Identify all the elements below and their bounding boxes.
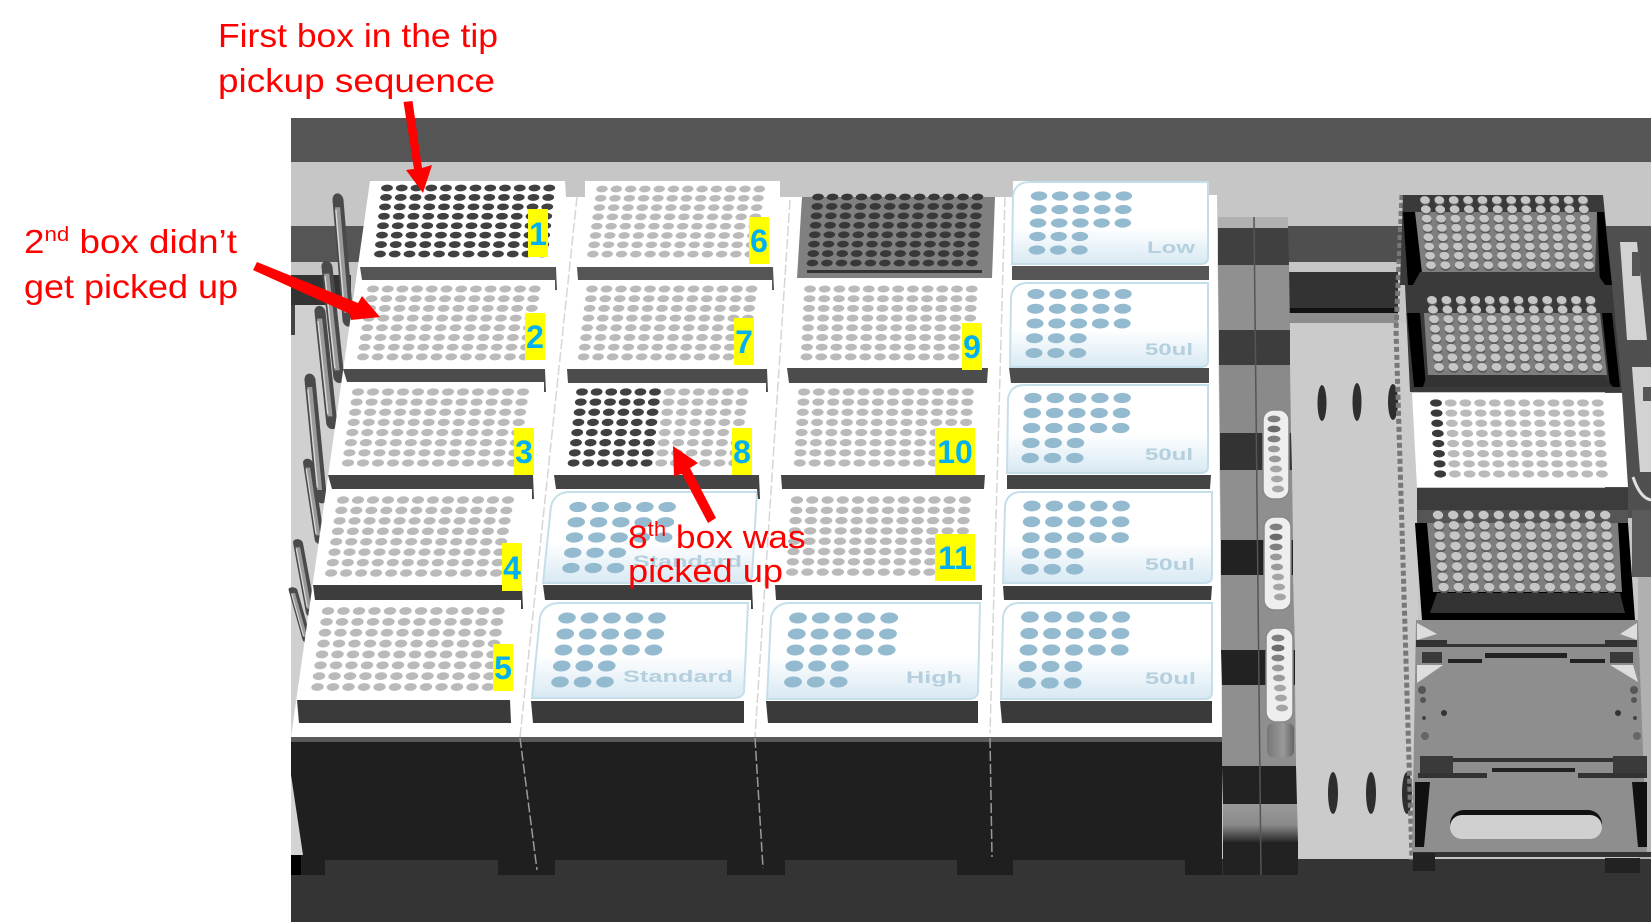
callout: eighth box xyxy=(628,519,806,589)
tip box Standard row 4 xyxy=(543,492,757,583)
stack rail speckle xyxy=(1396,195,1412,860)
tip box High xyxy=(767,603,980,699)
label: number 8 xyxy=(732,428,752,475)
tube 1 xyxy=(1263,410,1289,499)
tip box 50ul row 4: 50ul xyxy=(1145,555,1195,574)
box 2: full xyxy=(357,286,541,360)
label: number 5 xyxy=(493,644,513,691)
box 7: full xyxy=(577,286,758,360)
panel: dark front bars of the boxes xyxy=(297,266,1212,723)
callout: eighth box: th xyxy=(648,519,666,541)
stack 1 xyxy=(1400,195,1612,285)
callout: second box: box didn’t xyxy=(69,224,237,261)
callout: eighth box: box was xyxy=(666,520,806,556)
label: number 10: 10 xyxy=(937,434,973,470)
label: number 1 xyxy=(528,209,548,257)
column dividers xyxy=(520,197,1005,870)
right edge device xyxy=(1605,228,1651,859)
tube 2 xyxy=(1264,517,1291,610)
tip box 50ul row 3: 50ul xyxy=(1145,445,1193,464)
tip box 50ul row 2: 50ul xyxy=(1145,340,1193,359)
empty carrier xyxy=(1412,620,1651,873)
label: number 11: 11 xyxy=(938,540,972,576)
tip box Low: Low xyxy=(1147,238,1196,257)
stack 2 xyxy=(1405,285,1622,392)
icons: support rods on the left xyxy=(291,200,348,640)
label: number 4: 4 xyxy=(503,550,521,586)
callout: first box: pickup sequence xyxy=(218,62,495,99)
box 10: full xyxy=(794,388,974,467)
callout: first box: First box in the tip xyxy=(218,17,498,54)
tip box High: High xyxy=(906,668,962,687)
tip box 50ul row 5: 50ul xyxy=(1145,669,1196,688)
arrow: to second box xyxy=(253,262,380,320)
box 1: picked up, all dark xyxy=(374,185,556,257)
tip box 50ul row 5 xyxy=(1001,603,1212,699)
dark rack, column 3 xyxy=(797,194,995,278)
tip box 50ul row 2 xyxy=(1010,283,1208,367)
panel: front base of deck xyxy=(291,737,1222,876)
label: number 5: 5 xyxy=(494,650,512,686)
callout: second box: nd xyxy=(44,224,69,246)
label: number 2: 2 xyxy=(526,319,544,355)
callout: eighth box: picked up xyxy=(628,553,783,589)
box 5: full xyxy=(311,607,505,691)
tip box Standard row 5: Standard xyxy=(623,667,733,686)
icons: small tip tubes on the rail xyxy=(1263,410,1294,757)
callout: second box: 2 xyxy=(24,224,44,261)
box 3: full xyxy=(341,388,530,467)
label: number 9 xyxy=(962,323,982,370)
stack 3: white box with one picked column xyxy=(1412,393,1628,510)
tip box 50ul row 4 xyxy=(1003,492,1212,583)
label: number 10 xyxy=(935,428,975,475)
panel: right rack of tip stacks xyxy=(1396,195,1651,873)
label: number 3 xyxy=(514,428,534,475)
callout: second box xyxy=(24,224,238,305)
tip box Standard row 5 xyxy=(532,603,748,698)
callout: first box xyxy=(218,17,498,99)
label: number 8: 8 xyxy=(733,434,751,470)
box 8: partly picked up xyxy=(567,388,749,467)
box 11: full xyxy=(786,496,971,576)
label: number 9: 9 xyxy=(963,329,981,365)
panel: blue labelled tip boxes xyxy=(532,182,1212,699)
tip box Standard row 4: Standard xyxy=(633,552,742,571)
icons: dark oval slots xyxy=(1318,383,1412,814)
callout: eighth box: 8 xyxy=(628,520,648,556)
box 9: full xyxy=(800,286,978,360)
panel: tip box grids xyxy=(311,185,995,691)
label: number 6: 6 xyxy=(750,223,768,259)
label: number 2 xyxy=(525,313,545,360)
callout: second box: get picked up xyxy=(24,268,238,305)
label: number 7: 7 xyxy=(735,324,753,360)
box 4: full xyxy=(324,496,515,577)
stack 4 xyxy=(1415,510,1635,620)
tube 3 xyxy=(1266,628,1294,757)
label: number 3: 3 xyxy=(515,434,533,470)
arrow: to eighth box xyxy=(673,446,716,523)
panel: striped rails xyxy=(1218,217,1298,875)
box 6: full xyxy=(587,186,765,257)
tip box 50ul row 3 xyxy=(1007,385,1208,473)
panel: deck background xyxy=(291,118,1651,922)
arrow: to first box xyxy=(404,101,432,193)
label: number 7 xyxy=(734,318,754,365)
label: number 11 xyxy=(935,534,975,581)
tip box Low xyxy=(1012,182,1208,264)
label: number 6 xyxy=(749,217,769,264)
label: number 4 xyxy=(502,543,522,591)
panel: white tip deck plate xyxy=(291,181,1222,737)
label: number 1: 1 xyxy=(529,216,547,252)
